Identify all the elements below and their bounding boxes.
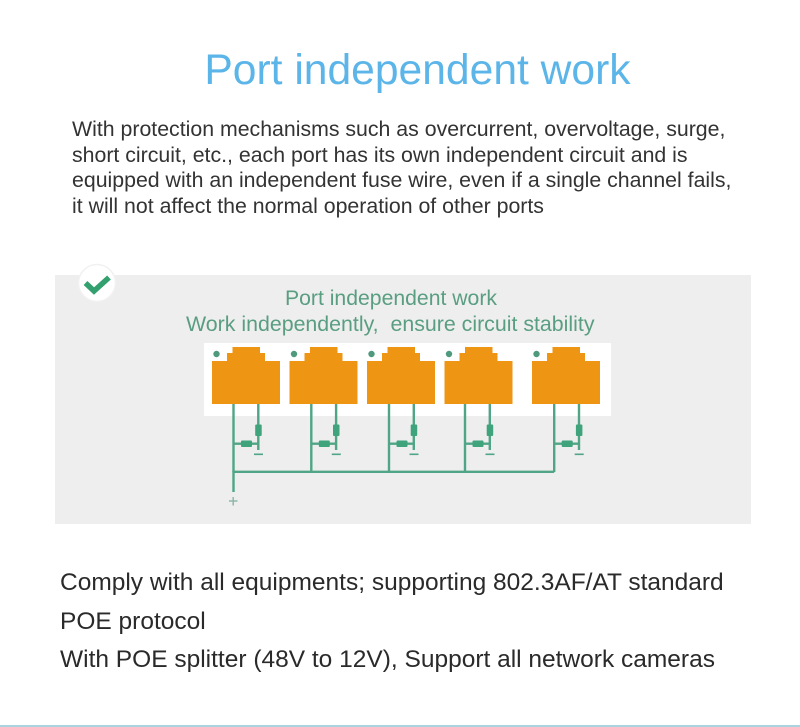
description text block: it will not affect the normal operation of other ports (72, 194, 544, 218)
title: Port independent work (204, 46, 631, 94)
port 2 (290, 347, 358, 404)
port 4 (444, 347, 512, 404)
diagram subheading: Work independently, ensure circuit stability (186, 312, 594, 336)
white port strip (204, 343, 611, 416)
description text block: short circuit, etc., each port has its own independent circuit and is (72, 143, 688, 167)
port 3 (367, 347, 435, 404)
bottom rule (0, 725, 800, 727)
diagram heading: Port independent work (285, 287, 497, 310)
port 2 circuit (311, 404, 341, 472)
port 5 (532, 347, 600, 404)
plus sign (229, 497, 238, 506)
panel: port diagram (55, 275, 751, 524)
compatibility text block (60, 569, 724, 673)
icon: check mark badge (79, 264, 115, 301)
port 5 circuit (554, 404, 584, 472)
compatibility text block: POE protocol (60, 608, 206, 634)
port 4 circuit (465, 404, 494, 472)
description text block (72, 117, 731, 218)
port 3 circuit (389, 404, 418, 472)
compatibility text block: With POE splitter (48V to 12V), Support all network cameras (60, 646, 715, 673)
port 1 circuit (234, 404, 263, 472)
description text block: With protection mechanisms such as overcurrent, overvoltage, surge, (72, 117, 725, 141)
common bus (234, 471, 554, 492)
port 1 (212, 347, 280, 404)
description text block: equipped with an independent fuse wire, even if a single channel fails, (72, 168, 731, 192)
compatibility text block: Comply with all equipments; supporting 802.3AF/AT standard (60, 569, 724, 596)
